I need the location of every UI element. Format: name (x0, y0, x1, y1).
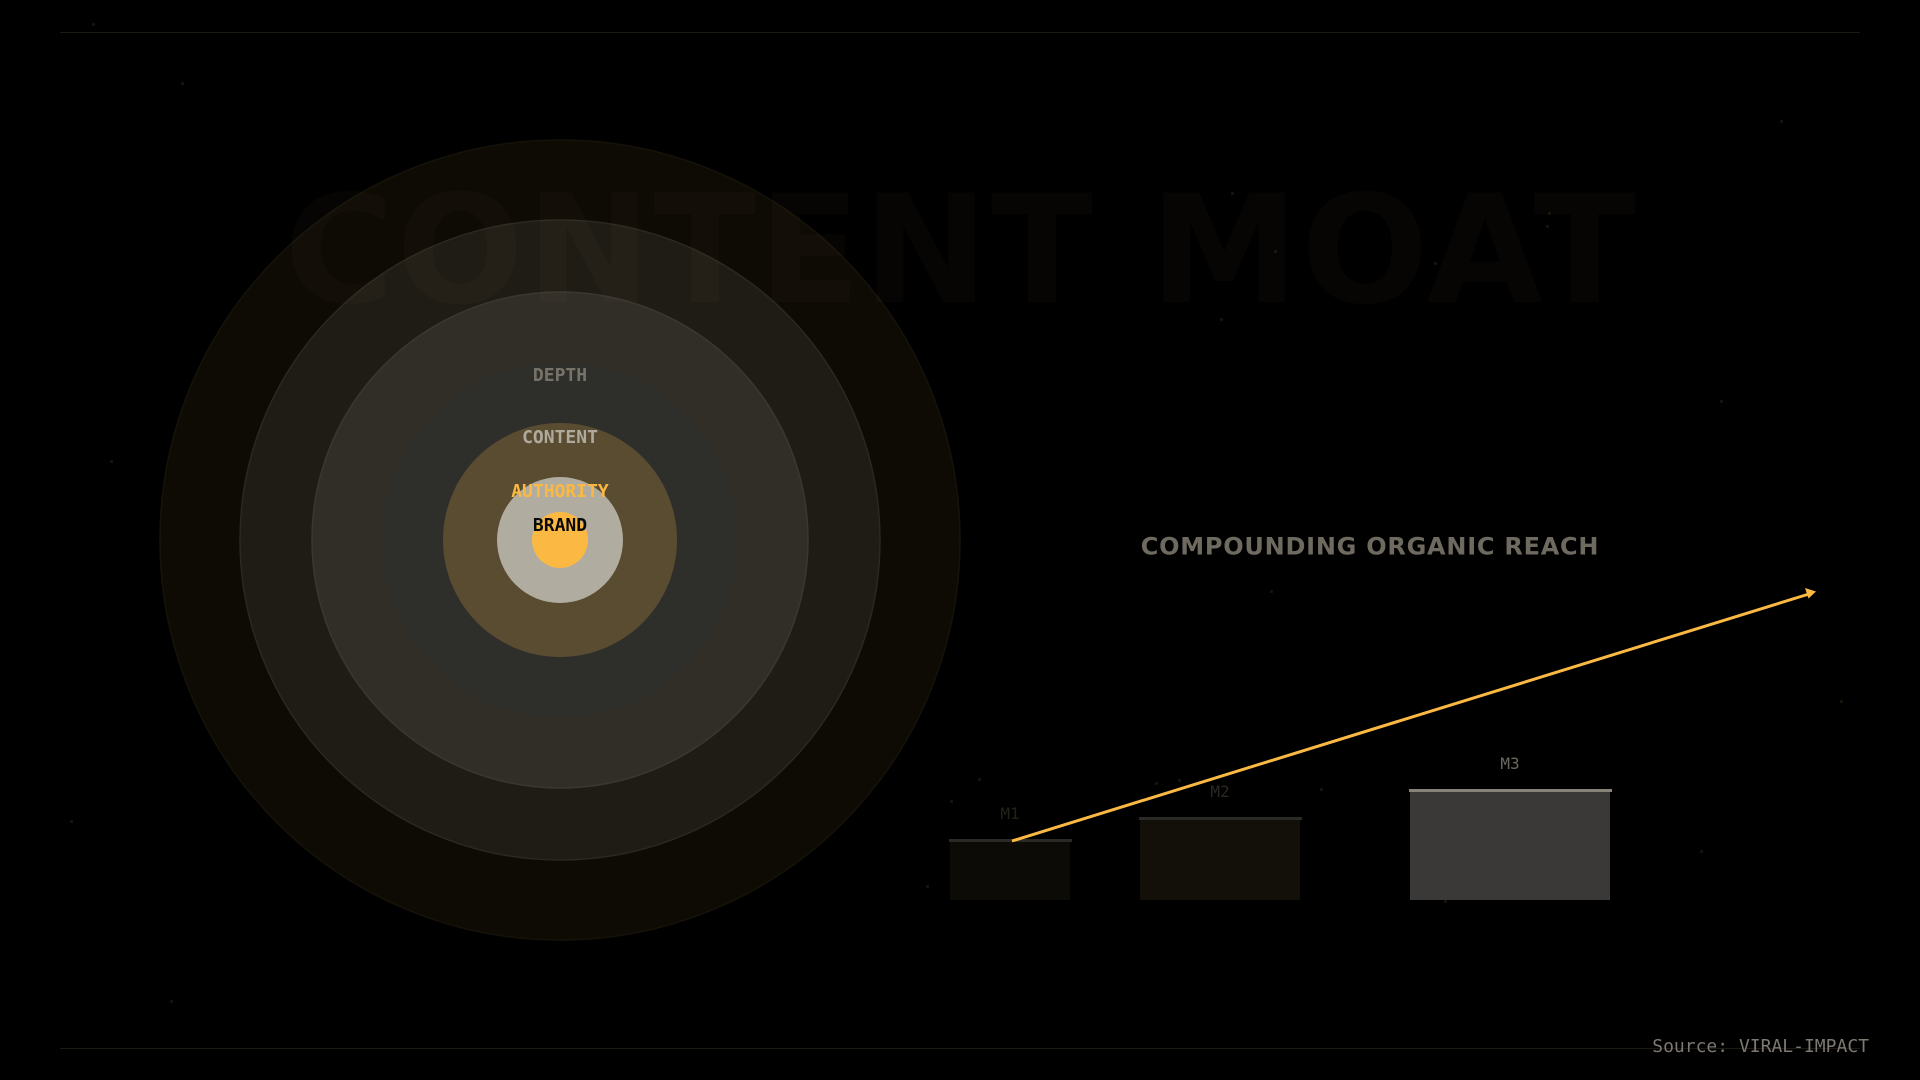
moat diagram: concentric rings (160, 140, 960, 940)
arrow: growth trend (1012, 588, 1816, 841)
label: authority: AUTHORITY (511, 481, 609, 502)
bar: M2: M2 (1210, 782, 1230, 801)
ring: authority (497, 477, 623, 603)
ring: outer (160, 140, 960, 940)
ring: depth (382, 362, 738, 718)
ring: content (443, 423, 677, 657)
source note: Source: VIRAL-IMPACT (1652, 1036, 1869, 1057)
ring: brand core (532, 512, 588, 568)
ring: second (240, 220, 880, 860)
label: depth: DEPTH (533, 365, 587, 386)
bar: M1: M1 (1000, 804, 1020, 823)
chart heading: COMPOUNDING ORGANIC REACH (1141, 532, 1599, 560)
bar: M3: M3 (1500, 754, 1520, 773)
bar: M2 (1139, 782, 1302, 900)
bar: M1 (949, 804, 1072, 900)
label: brand: BRAND (533, 515, 587, 536)
bar chart: compounding organic reach (949, 532, 1612, 900)
bar: M3 (1409, 754, 1612, 900)
ring: third (312, 292, 808, 788)
title watermark: CONTENT MOAT (284, 164, 1638, 338)
label: content: CONTENT (522, 427, 598, 448)
